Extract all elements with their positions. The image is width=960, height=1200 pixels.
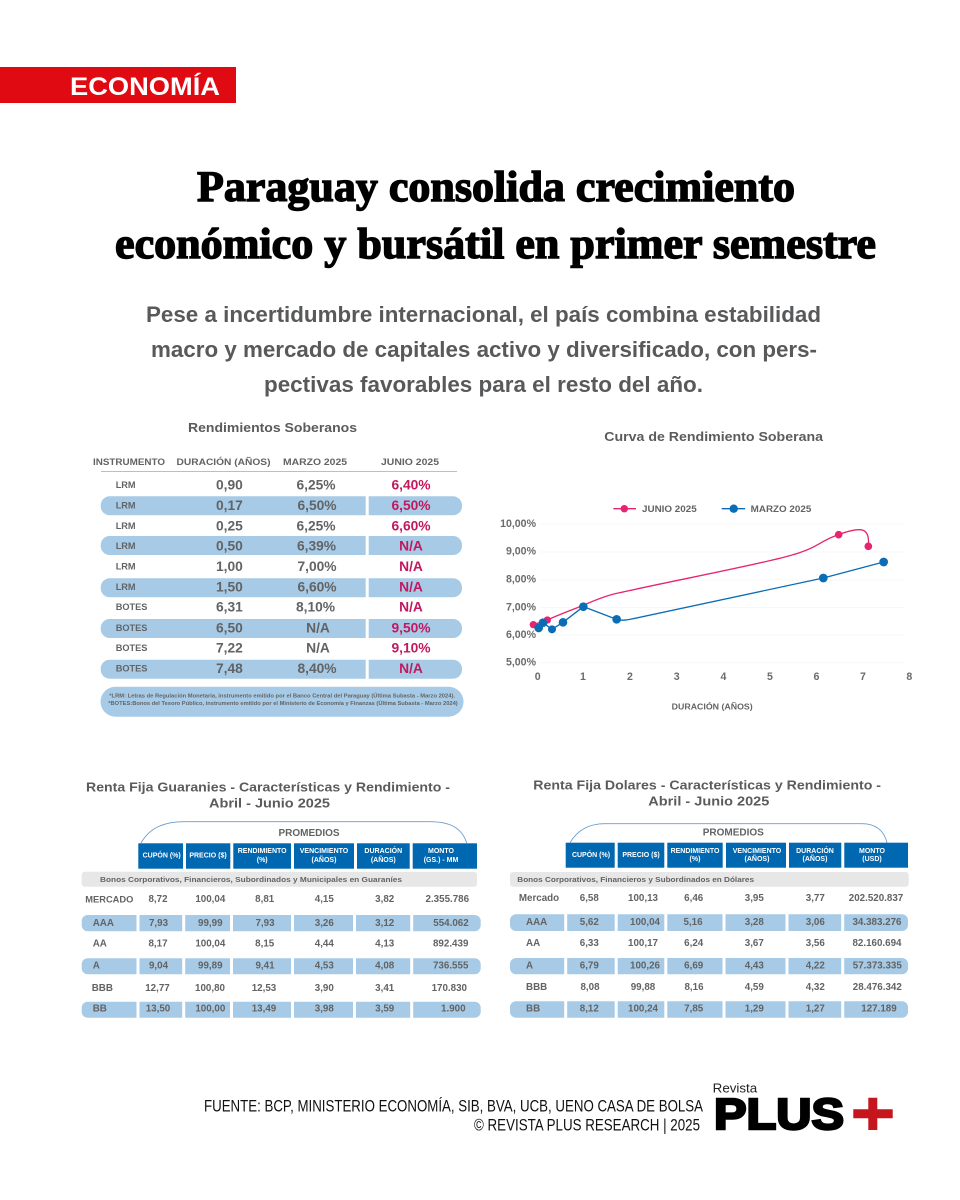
section tag: Economía: ECONOMÍA — [70, 72, 220, 101]
table rows: 8,17 — [148, 938, 168, 950]
table rows: BBB — [92, 983, 113, 994]
promedios bracket — [570, 824, 887, 843]
heading: Renta Fija Dolares: Abril - Junio 2025 — [648, 794, 769, 808]
column headers — [138, 843, 477, 869]
table rows: 7,93 — [255, 918, 275, 929]
source credits: © REVISTA PLUS RESEARCH | 2025 — [474, 1116, 700, 1134]
table rows: AA — [93, 938, 107, 950]
panel: Renta Fija Guaranies table — [82, 780, 481, 1018]
table rows: 4,59 — [745, 982, 764, 993]
table rows: 9,50% — [391, 620, 431, 636]
table rows: 7,48 — [216, 661, 243, 676]
table rows: 100,04 — [195, 894, 226, 905]
table rows: BOTES — [116, 623, 147, 633]
table rows: 4,15 — [315, 894, 334, 905]
y axis labels: 10,00% — [500, 518, 537, 530]
table rows: 57.373.335 — [853, 960, 902, 972]
table rows: AAA — [93, 918, 114, 929]
y axis labels — [500, 518, 537, 669]
table rows: 1,29 — [745, 1004, 764, 1014]
table rows: N/A — [399, 580, 423, 594]
table rows — [519, 893, 904, 1014]
table rows: 3,06 — [806, 917, 825, 928]
table rows: 8,08 — [580, 982, 600, 993]
promedios bracket — [141, 822, 467, 843]
table rows: 0,25 — [216, 518, 243, 534]
table rows: 12,77 — [145, 983, 170, 994]
x axis labels: 5 — [767, 671, 773, 683]
column headers: (USD) — [862, 856, 882, 863]
table rows: AA — [526, 938, 540, 949]
table rows: 100,24 — [628, 1004, 659, 1014]
table rows: LRM — [116, 582, 136, 592]
table rows: 8,15 — [255, 938, 275, 950]
category bar — [510, 872, 909, 887]
table rows: 6,33 — [580, 938, 599, 949]
column headers: PRECIO ($) — [189, 852, 227, 860]
subtitle: pectivas favorables para el resto del año. — [264, 372, 703, 397]
table rows: 202.520.837 — [849, 893, 904, 904]
table header row: MARZO 2025 — [283, 457, 347, 467]
table header row: DURACIÓN (AÑOS) — [176, 456, 270, 467]
table rows: 4,32 — [806, 982, 825, 993]
table rows: 3,95 — [745, 893, 764, 904]
heading: Curva de Rendimiento Soberana: Curva de Rendimiento Soberana — [604, 430, 824, 444]
table rows: 892.439 — [433, 938, 469, 950]
table rows: BB — [93, 1004, 107, 1014]
column headers: MONTO — [859, 848, 886, 855]
table rows: 6,60% — [297, 580, 337, 594]
table rows: 6,60% — [391, 518, 431, 534]
footnote pill: *LRM: Letras de Regulación Monetaria, instrumento emitido por el Banco Central del Paraguay (Última Subasta - Marzo 2024). — [109, 693, 456, 700]
logo: Revista Plus: PLUS — [714, 1091, 844, 1139]
row bands — [510, 914, 908, 1018]
table rows: 7,85 — [684, 1004, 704, 1014]
table rows: 6,46 — [684, 893, 704, 904]
chart legend: MARZO 2025 — [751, 504, 811, 514]
table rows: BBB — [526, 982, 547, 993]
table rows: 6,25% — [296, 518, 336, 534]
x axis labels: 2 — [627, 671, 633, 683]
source credits — [204, 1096, 704, 1134]
x axis labels: 1 — [580, 671, 586, 683]
column headers: CUPÓN (%) — [572, 850, 610, 859]
heading: Renta Fija Guaranies: Abril - Junio 2025 — [209, 796, 330, 810]
table rows: 100,04 — [630, 917, 661, 928]
table rows: BOTES — [116, 664, 147, 674]
table rows: 100,26 — [630, 960, 661, 972]
column headers: DURACIÓN — [796, 846, 834, 855]
table rows: 6,39% — [297, 538, 336, 554]
footnote pill — [100, 687, 464, 717]
table rows: 8,16 — [684, 982, 704, 993]
table rows: 7,22 — [216, 640, 243, 656]
table rows: BB — [526, 1004, 540, 1014]
table rows: 82.160.694 — [852, 938, 902, 949]
table rows: 3,59 — [375, 1004, 395, 1014]
heading: Renta Fija Dolares: Renta Fija Dolares - Características y Rendimiento - — [533, 778, 881, 792]
table rows: LRM — [116, 480, 136, 490]
table rows: 0,17 — [216, 498, 243, 513]
table rows: 0,90 — [216, 478, 243, 492]
table rows: 5,62 — [580, 917, 599, 928]
table rows: LRM — [116, 521, 136, 531]
column headers: PRECIO ($) — [622, 852, 660, 859]
column headers: (%) — [257, 857, 268, 864]
x axis labels: 3 — [674, 671, 680, 683]
title — [115, 164, 876, 268]
column headers: MONTO — [428, 848, 455, 855]
table rows: N/A — [306, 640, 330, 656]
table rows: N/A — [399, 538, 423, 554]
y axis labels: 7,00% — [506, 602, 537, 614]
table rows: N/A — [399, 600, 423, 614]
table rows: N/A — [399, 661, 423, 676]
table rows: 6,50 — [216, 620, 243, 636]
table rows — [85, 894, 470, 1014]
table rows: 13,50 — [146, 1004, 171, 1014]
table rows: AAA — [526, 917, 547, 928]
table rows: 6,58 — [580, 893, 599, 904]
line series: Junio 2025 — [530, 530, 872, 628]
table rows: 4,44 — [315, 938, 334, 950]
table rows: 5,16 — [683, 917, 703, 928]
table rows: 8,40% — [297, 661, 337, 676]
table rows: 2.355.786 — [426, 894, 470, 905]
table rows: 3,77 — [806, 893, 825, 904]
line series: Marzo 2025 — [534, 558, 888, 633]
column headers: (%) — [690, 856, 700, 863]
table rows: LRM — [116, 541, 136, 551]
table header row: INSTRUMENTO — [93, 457, 165, 467]
table rows: 8,10% — [296, 600, 335, 614]
logo: Revista Plus: Revista — [713, 1080, 758, 1096]
column headers: CUPÓN (%) — [143, 850, 181, 860]
heading: Renta Fija Dolares — [533, 778, 881, 808]
table rows: A — [526, 960, 533, 972]
table rows — [116, 478, 431, 676]
table rows: 100,80 — [195, 983, 226, 994]
y axis labels: 8,00% — [506, 574, 537, 586]
table rows: 3,26 — [315, 918, 334, 929]
table rows: 3,12 — [375, 918, 395, 929]
table rows: BOTES — [116, 643, 147, 653]
table rows: 100,00 — [195, 1004, 226, 1014]
panel: Rendimientos Soberanos table — [93, 421, 464, 717]
table rows: 127.189 — [861, 1004, 897, 1014]
table rows: 34.383.276 — [852, 917, 902, 928]
table rows: 554.062 — [433, 918, 469, 929]
column headers: VENCIMIENTO — [300, 848, 349, 855]
x axis labels: 0 — [535, 671, 541, 683]
column headers: (AÑOS) — [803, 854, 827, 863]
panel: Renta Fija Dolares table — [510, 778, 909, 1018]
table rows: N/A — [306, 620, 330, 636]
table rows: MERCADO — [85, 894, 133, 904]
title: Paraguay consolida crecimiento — [197, 164, 795, 211]
x axis labels: 6 — [814, 671, 820, 683]
x axis labels: 8 — [906, 671, 912, 683]
table rows: 0,50 — [216, 538, 243, 554]
table rows: Mercado — [519, 893, 559, 904]
column headers: (AÑOS) — [371, 855, 396, 864]
column headers: (AÑOS) — [745, 854, 769, 863]
column headers — [566, 843, 908, 868]
table rows: 9,41 — [255, 960, 275, 972]
table rows: 28.476.342 — [853, 982, 902, 993]
table rows: 12,53 — [252, 983, 277, 994]
table header row: JUNIO 2025 — [381, 457, 439, 467]
table rows: 4,53 — [315, 960, 334, 972]
chart legend: JUNIO 2025 — [642, 504, 697, 514]
source credits: FUENTE: BCP, MINISTERIO ECONOMÍA, SIB, BVA, UCB, UENO CASA DE BOLSA — [204, 1096, 704, 1116]
y axis labels: 9,00% — [506, 546, 537, 558]
table rows: 100,13 — [628, 893, 659, 904]
table rows: 6,40% — [391, 478, 431, 492]
table rows: 8,12 — [580, 1004, 599, 1014]
column headers: (GS.) - MM — [424, 857, 458, 864]
table rows: 100,17 — [628, 938, 659, 949]
table rows: 6,50% — [297, 498, 337, 513]
logo: Revista Plus — [713, 1080, 893, 1139]
category bar: Bonos Corporativos, Financieros y Subordinados en Dólares — [517, 875, 754, 884]
table rows: 6,79 — [580, 960, 599, 972]
table rows: 736.555 — [433, 960, 469, 972]
row bands — [101, 496, 462, 679]
table rows: 3,98 — [315, 1004, 334, 1014]
table rows: 3,41 — [375, 983, 395, 994]
x axis labels — [535, 671, 912, 683]
table rows: 1.900 — [441, 1004, 466, 1014]
column headers: RENDIMIENTO — [238, 848, 287, 855]
table rows: 6,24 — [684, 938, 704, 949]
heading: Renta Fija Guaranies: Renta Fija Guaranies - Características y Rendimiento - — [86, 780, 450, 794]
table rows: 9,04 — [149, 960, 169, 972]
table rows: N/A — [399, 559, 423, 574]
footnote pill: *BOTES:Bonos del Tesoro Público, instrumento emitido por el Ministerio de Economía y Finanzas (Última Subasta - Marzo 2024) — [108, 700, 458, 707]
table rows: 3,67 — [745, 938, 764, 949]
y axis labels: 6,00% — [506, 629, 537, 641]
y axis labels: 5,00% — [506, 657, 537, 669]
category bar — [82, 872, 477, 887]
table header row — [93, 456, 457, 472]
table rows: BOTES — [116, 602, 147, 612]
subtitle — [146, 302, 821, 397]
table rows: 4,22 — [806, 960, 825, 972]
panel: Curva de Rendimiento Soberana chart — [500, 430, 912, 712]
promedios bracket: PROMEDIOS — [278, 828, 340, 839]
column headers: (AÑOS) — [312, 855, 336, 864]
table rows: LRM — [116, 562, 136, 572]
table rows: A — [93, 960, 100, 972]
column headers: DURACIÓN — [364, 846, 402, 855]
table rows: 13,49 — [252, 1004, 277, 1014]
column headers: RENDIMIENTO — [671, 848, 720, 855]
chart legend — [613, 504, 811, 514]
table rows: 6,31 — [216, 600, 243, 614]
table rows: 6,69 — [684, 960, 704, 972]
x axis labels: 7 — [860, 671, 866, 683]
table rows: 1,50 — [216, 580, 243, 594]
table rows: 6,25% — [296, 478, 336, 492]
table rows: 1,27 — [806, 1004, 825, 1014]
table rows: 8,72 — [148, 894, 168, 905]
table rows: 100,04 — [195, 938, 226, 950]
table rows: 3,90 — [315, 983, 334, 994]
table rows: 99,88 — [631, 982, 656, 993]
table rows: 7,93 — [149, 918, 169, 929]
table rows: 4,13 — [375, 938, 395, 950]
table rows: 99,99 — [198, 918, 223, 929]
section tag: Economía — [0, 67, 236, 103]
table rows: 3,56 — [806, 938, 825, 949]
table rows: 4,43 — [745, 960, 764, 972]
table rows: 9,10% — [391, 640, 431, 656]
subtitle: Pese a incertidumbre internacional, el país combina estabilidad — [146, 302, 821, 327]
table rows: 6,50% — [391, 498, 431, 513]
column headers: VENCIMIENTO — [733, 848, 782, 855]
heading: Rendimientos Soberanos: Rendimientos Soberanos — [188, 421, 357, 435]
promedios bracket: PROMEDIOS — [703, 828, 764, 838]
row bands — [82, 914, 481, 1018]
subtitle: macro y mercado de capitales activo y diversificado, con pers- — [151, 337, 817, 362]
category bar: Bonos Corporativos, Financieros, Subordinados y Municipales en Guaraníes — [100, 875, 402, 884]
table rows: 8,81 — [255, 894, 275, 905]
table rows: 3,28 — [745, 917, 764, 928]
heading: Renta Fija Guaranies — [86, 780, 450, 810]
table rows: 3,82 — [375, 894, 395, 905]
table rows: 7,00% — [297, 559, 337, 574]
x axis labels: 4 — [721, 671, 727, 683]
table rows: 1,00 — [216, 559, 243, 574]
table rows: 4,08 — [375, 960, 395, 972]
x axis title: DURACIÓN (AÑOS) — [672, 702, 753, 712]
table rows: 170.830 — [432, 983, 468, 994]
table rows: LRM — [116, 500, 136, 510]
title: económico y bursátil en primer semestre — [115, 221, 876, 268]
table rows: 99,89 — [198, 960, 223, 972]
